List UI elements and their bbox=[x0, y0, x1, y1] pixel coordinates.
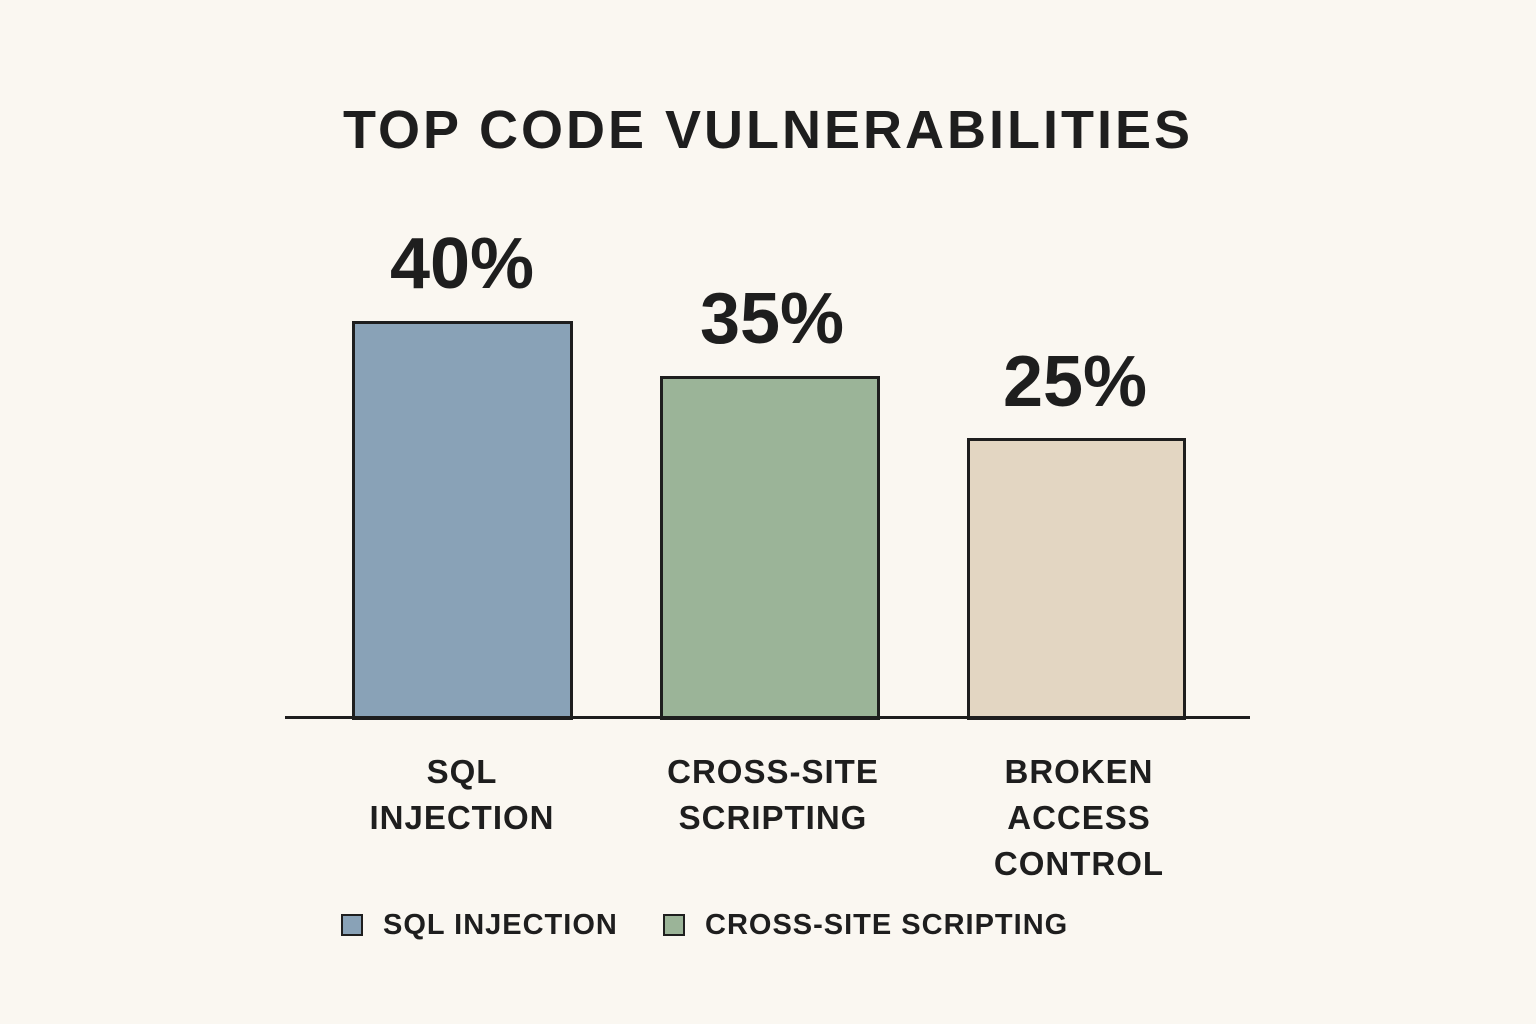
value label 25%: 25% bbox=[1003, 342, 1147, 422]
bar: SQL injection bbox=[352, 321, 573, 720]
legend bbox=[341, 909, 1068, 941]
category label: SQL injection bbox=[369, 753, 555, 836]
category label: cross-site scripting bbox=[667, 753, 879, 836]
category label: broken access control: ACCESS bbox=[1007, 799, 1151, 836]
bar: cross-site scripting bbox=[660, 376, 880, 720]
axis baseline bbox=[285, 716, 1250, 719]
value label 40%: 40% bbox=[390, 224, 534, 304]
category label: broken access control bbox=[994, 753, 1164, 882]
legend item: cross-site scripting: CROSS-SITE SCRIPTING bbox=[705, 909, 1068, 941]
category label: broken access control: CONTROL bbox=[994, 845, 1164, 882]
category label: cross-site scripting: SCRIPTING bbox=[679, 799, 867, 836]
category label: cross-site scripting: CROSS-SITE bbox=[667, 753, 879, 790]
value label 35%: 35% bbox=[700, 279, 844, 359]
category label: broken access control: BROKEN bbox=[1004, 753, 1154, 790]
category label: SQL injection: INJECTION bbox=[369, 799, 555, 836]
category label: SQL injection: SQL bbox=[427, 753, 497, 790]
bar: broken access control bbox=[967, 438, 1186, 720]
legend item: SQL injection: SQL INJECTION bbox=[383, 909, 618, 941]
bar chart bbox=[285, 321, 1250, 720]
title: TOP CODE VULNERABILITIES bbox=[343, 100, 1193, 160]
